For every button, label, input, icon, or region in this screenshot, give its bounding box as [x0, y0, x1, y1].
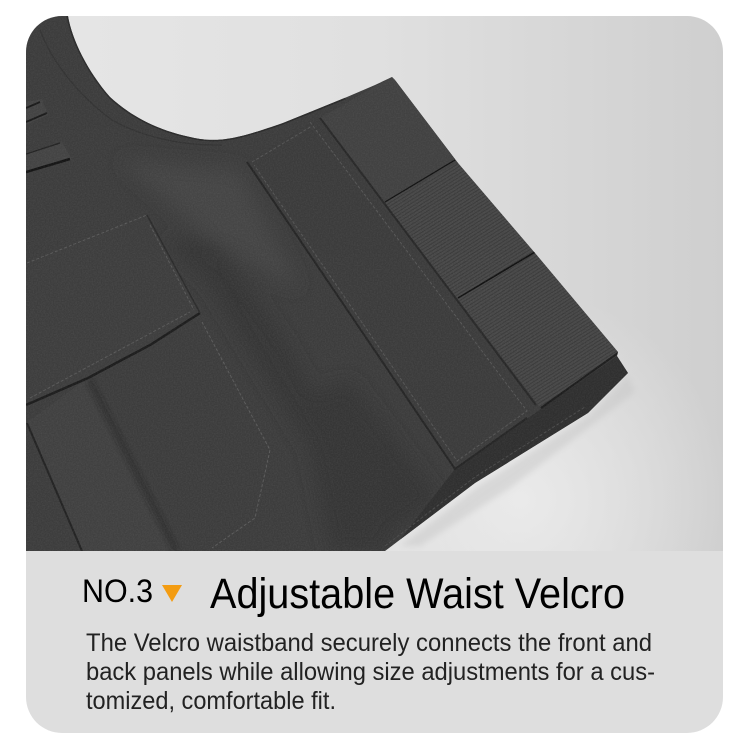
product photo	[20, 16, 723, 551]
description	[86, 629, 655, 715]
pocket body	[26, 313, 273, 551]
description: tomized, comfortable fit.	[86, 687, 336, 715]
neckline binding	[68, 16, 345, 140]
neckline stitching	[40, 30, 222, 145]
elastic slit 1	[385, 160, 455, 202]
caption panel	[26, 551, 723, 733]
pocket flap	[20, 215, 200, 408]
under panel	[400, 356, 628, 540]
photo background	[26, 16, 723, 551]
cast shadow	[400, 376, 635, 546]
velcro flap	[247, 118, 537, 469]
feature number: NO.3	[82, 573, 153, 609]
elastic bottom edge	[541, 353, 618, 408]
heading: Adjustable Waist Velcro	[210, 570, 625, 618]
chest loop lower	[26, 142, 72, 173]
pocket flap stitching	[27, 215, 194, 398]
under panel stitching	[385, 407, 585, 546]
chest loop upper	[26, 101, 48, 123]
description: The Velcro waistband securely connects the front and	[86, 629, 652, 657]
fabric grain	[20, 16, 660, 551]
vest body	[20, 16, 660, 551]
pocket pleat lines	[89, 380, 176, 551]
vest	[20, 16, 660, 551]
flap stitching	[252, 122, 527, 461]
description: back panels while allowing size adjustments for a cus-	[86, 658, 655, 686]
elastic slit 2	[458, 252, 535, 298]
pocket stitching	[202, 322, 270, 548]
velcro elastic strap	[382, 77, 618, 409]
icon: orange down triangle	[162, 585, 182, 602]
fabric fold shading	[161, 176, 398, 551]
